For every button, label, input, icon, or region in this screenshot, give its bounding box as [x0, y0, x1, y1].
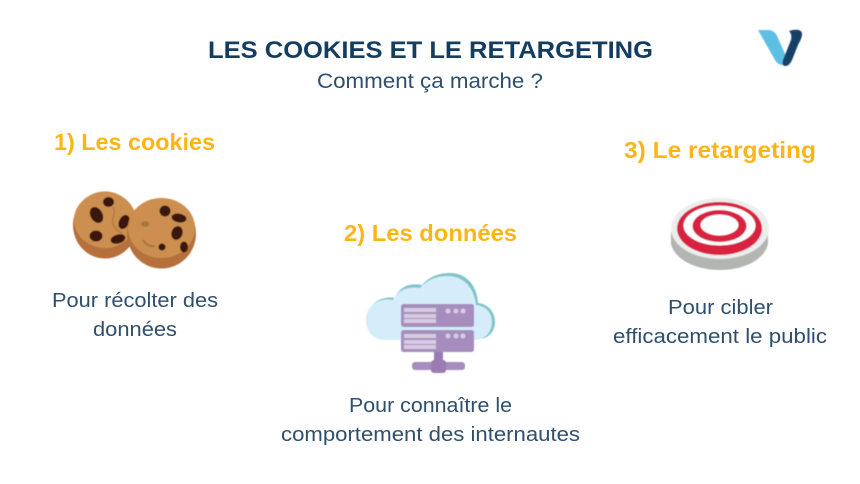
- right cookie: [127, 198, 196, 268]
- cloud: [366, 273, 495, 340]
- server stand: [412, 352, 465, 373]
- server unit bottom: [401, 330, 474, 352]
- icon: cookies: [73, 192, 196, 268]
- text: step 3 description: [613, 297, 827, 348]
- text: step 1 description: Pour récolter des: [52, 290, 218, 312]
- text: step 3 description: Pour cibler: [668, 297, 773, 319]
- icon: target: [671, 198, 769, 270]
- text: step 1 description: données: [93, 319, 177, 341]
- text: step 2 description: [281, 395, 580, 446]
- icon: logo: [758, 30, 802, 66]
- heading: step 1: 1) Les cookies: [54, 129, 215, 155]
- text: step 1 description: [52, 290, 218, 341]
- subtitle: Comment ça marche ?: [317, 70, 543, 93]
- heading: step 2: 2) Les données: [344, 220, 517, 246]
- icon: cloud server: [366, 273, 495, 373]
- text: step 2 description: Pour connaître le: [349, 395, 512, 417]
- text: step 3 description: efficacement le public: [613, 326, 827, 348]
- left cookie: [73, 192, 137, 258]
- title: LES COOKIES ET LE RETARGETING: [208, 37, 653, 64]
- text: step 2 description: comportement des internautes: [281, 424, 580, 446]
- heading: step 3: 3) Le retargeting: [624, 137, 816, 163]
- server unit top: [401, 304, 474, 327]
